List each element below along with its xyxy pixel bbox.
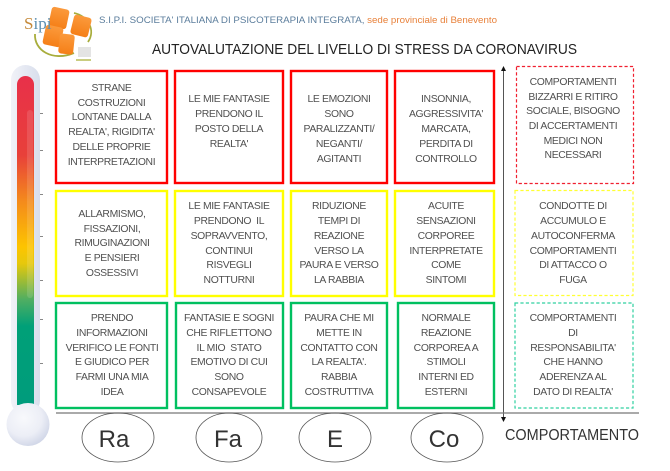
- panel: row 2 E: RIDUZIONE: [312, 201, 366, 212]
- panel: behaviour red: COMPORTAMENTI: [530, 77, 616, 88]
- panel: behaviour red: BIZZARRI E RITIRO: [528, 92, 618, 103]
- panel: row 1 E: [291, 71, 387, 183]
- panel: row 2 E: LA RABBIA: [314, 275, 364, 286]
- panel: row 2 Co: CORPOREE: [418, 231, 475, 242]
- panel: row 1 Fa: [175, 71, 283, 183]
- panel: row 3 Ra: VERIFICO LE FONTI: [66, 343, 158, 354]
- panel: row 3 Co: REAZIONE: [421, 328, 472, 339]
- label: comportamento: COMPORTAMENTO: [505, 427, 639, 444]
- label: Co: [411, 413, 483, 462]
- thermometer colour bar: [17, 76, 34, 405]
- panel: row 2 Co: [395, 191, 494, 296]
- panel: row 2 Fa: CONTINUI: [205, 246, 253, 257]
- panel: behaviour yellow: DI ATTACCO O: [539, 260, 607, 271]
- panel: row 1 E: LE EMOZIONI: [307, 94, 371, 105]
- panel: row 3 Fa: CONSAPEVOLE: [192, 387, 267, 398]
- panel: row 3 Co: CORPOREA A: [414, 343, 479, 354]
- panel: behaviour yellow: COMPORTAMENTI: [530, 246, 616, 257]
- panel: row 1 Co: AGGRESSIVITA': [409, 109, 483, 120]
- panel: row 2 Fa: NOTTURNI: [204, 275, 254, 286]
- panel: row 1 Fa: LE MIE FANTASIE: [188, 94, 270, 105]
- panel: row 3 Ra: PRENDO: [91, 313, 133, 324]
- panel: behaviour yellow: ACCUMULO E: [540, 216, 606, 227]
- panel: row 3 Fa: SONO: [214, 372, 244, 383]
- panel: row 1 E: PARALIZZANTI/: [304, 124, 375, 135]
- axis: vertical arrow: [501, 66, 506, 422]
- panel: behaviour red: MEDICI NON: [544, 136, 602, 147]
- thermometer tube: [11, 65, 40, 415]
- title: AUTOVALUTAZIONE DEL LIVELLO DI STRESS DA CORONAVIRUS: [152, 42, 577, 58]
- panel: behaviour yellow: FUGA: [559, 275, 587, 286]
- panel: behaviour green: ADERENZA AL: [539, 372, 607, 383]
- panel: row 3 Co: STIMOLI: [426, 357, 466, 368]
- panel: behaviour green: COMPORTAMENTI: [530, 313, 616, 324]
- panel: row 3 E: LA REALTA'.: [312, 357, 366, 368]
- panel: row 3 Ra: IDEA: [101, 387, 124, 398]
- panel: row 2 Ra: E PENSIERI: [85, 253, 139, 264]
- panel: behaviour red: DI ACCERTAMENTI: [529, 121, 617, 132]
- panel: row 1 Ra: REALTA', RIGIDITA': [68, 127, 155, 138]
- label: Fa: [196, 413, 262, 462]
- panel: row 2 E: REAZIONE: [314, 231, 365, 242]
- panel: row 1 Co: INSONNIA,: [421, 94, 471, 105]
- panel: row 3 E: [291, 303, 387, 408]
- panel: row 3 Ra: FARMI UNA MIA: [76, 372, 149, 383]
- panel: behaviour red: SOCIALE, BISOGNO: [526, 106, 620, 117]
- panel: row 2 Ra: FISSAZIONI,: [84, 224, 140, 235]
- panel: row 2 Ra: OSSESSIVI: [86, 268, 138, 279]
- panel: row 2 Co: ACUITE: [428, 201, 464, 212]
- panel: behaviour green: DI: [568, 328, 578, 339]
- panel: row 3 Fa: CHE RIFLETTONO: [186, 328, 272, 339]
- panel: row 3 E: CONTATTO CON: [300, 343, 378, 354]
- panel: row 2 Co: SENSAZIONI: [416, 216, 476, 227]
- panel: row 3 Fa: EMOTIVO DI CUI: [190, 357, 268, 368]
- panel: row 1 Fa: PRENDONO IL: [195, 109, 263, 120]
- label: Ra: [82, 413, 154, 462]
- panel: row 2 Co: INTERPRETATE: [409, 246, 483, 257]
- panel: row 2 E: PAURA E VERSO: [300, 260, 379, 271]
- panel: row 2 Fa: RISVEGLI: [206, 260, 252, 271]
- panel: row 1 Co: MARCATA,: [421, 124, 471, 135]
- panel: row 2 E: VERSO LA: [314, 246, 364, 257]
- panel: row 1 Ra: [56, 71, 167, 183]
- logo wordmark: Sipi: [24, 14, 52, 33]
- panel: behaviour green: RESPONSABILITA': [530, 343, 616, 354]
- label: Ra: Ra: [99, 426, 130, 453]
- logo swoosh: [35, 13, 91, 56]
- thermometer bulb: [6, 403, 50, 446]
- panel: row 3 Fa: IL MIO STATO: [197, 343, 262, 354]
- panel: row 3 E: RABBIA: [321, 372, 357, 383]
- panel: row 3 E: PAURA CHE MI: [304, 313, 374, 324]
- panel: row 1 E: NEGANTI/: [316, 139, 363, 150]
- label: Fa: Fa: [214, 426, 243, 453]
- panel: behaviour yellow: AUTOCONFERMA: [531, 231, 615, 242]
- panel: behaviour red: NECESSARI: [545, 150, 601, 161]
- panel: row 3 Co: NORMALE: [422, 313, 471, 324]
- panel: row 2 Fa: [175, 191, 283, 296]
- panel: behaviour red: [516, 66, 634, 184]
- panel: row 1 Fa: POSTO DELLA: [195, 124, 263, 135]
- panel: row 1 Ra: LONTANE DALLA: [72, 112, 152, 123]
- panel: row 3 E: METTE IN: [316, 328, 362, 339]
- panel: behaviour green: DATO DI REALTA': [533, 387, 613, 398]
- panel: row 1 Ra: INTERPRETAZIONI: [68, 157, 155, 168]
- panel: row 1 Co: CONTROLLO: [415, 154, 477, 165]
- thermometer ticks: [40, 114, 43, 364]
- label: E: [299, 413, 371, 462]
- panel: row 1 Fa: REALTA': [210, 139, 249, 150]
- panel: row 2 Co: SINTOMI: [426, 275, 466, 286]
- panel: behaviour yellow: [515, 190, 633, 296]
- panel: row 3 Co: ESTERNI: [425, 387, 467, 398]
- label: E: E: [327, 426, 343, 453]
- panel: row 1 Ra: DELLE PROPRIE: [72, 142, 151, 153]
- panel: behaviour green: CHE HANNO: [543, 357, 603, 368]
- panel: row 3 Fa: [176, 303, 283, 408]
- baseline rule: [56, 412, 639, 414]
- panel: row 2 Ra: RIMUGINAZIONI: [74, 238, 150, 249]
- panel: row 2 Ra: ALLARMISMO,: [78, 209, 146, 220]
- panel: row 1 E: AGITANTI: [317, 154, 361, 165]
- panel: row 3 Ra: INFORMAZIONI: [76, 328, 148, 339]
- panel: row 3 Ra: [56, 303, 167, 408]
- panel: row 3 Co: [398, 303, 494, 408]
- panel: row 2 E: TEMPI DI: [318, 216, 360, 227]
- panel: row 1 Co: PERDITA DI: [419, 139, 473, 150]
- panel: row 1 Ra: STRANE: [91, 83, 132, 94]
- panel: row 3 Fa: FANTASIE E SOGNI: [184, 313, 274, 324]
- thermometer: [6, 65, 50, 446]
- panel: row 2 Co: COME: [431, 260, 461, 271]
- panel: behaviour green: [515, 303, 633, 408]
- label: Co: Co: [429, 426, 459, 453]
- header line: S.I.P.I. SOCIETA' ITALIANA DI PSICOTERAPIA INTEGRATA, sede provinciale di Benevento: [99, 15, 497, 26]
- logo: SIPI: [24, 6, 92, 61]
- logo caption: [76, 47, 91, 61]
- panel: row 2 Fa: PRENDONO IL: [194, 216, 265, 227]
- panel: row 3 E: COSTRUTTIVA: [305, 387, 374, 398]
- panel: row 3 Co: INTERNI ED: [418, 372, 474, 383]
- panel: row 2 Ra: [56, 191, 167, 296]
- panel: row 1 E: SONO: [324, 109, 354, 120]
- panel: behaviour yellow: CONDOTTE DI: [539, 201, 607, 212]
- panel: row 3 Ra: E GIUDICO PER: [75, 357, 150, 368]
- panel: row 1 Co: [395, 71, 494, 183]
- panel: row 2 E: [291, 191, 387, 296]
- panel: row 2 Fa: LE MIE FANTASIE: [188, 201, 270, 212]
- logo cubes: [42, 6, 92, 55]
- panel: row 2 Fa: SOPRAVVENTO,: [191, 231, 267, 242]
- thermometer highlight: [27, 110, 33, 298]
- panel: row 1 Ra: COSTRUZIONI: [78, 98, 145, 109]
